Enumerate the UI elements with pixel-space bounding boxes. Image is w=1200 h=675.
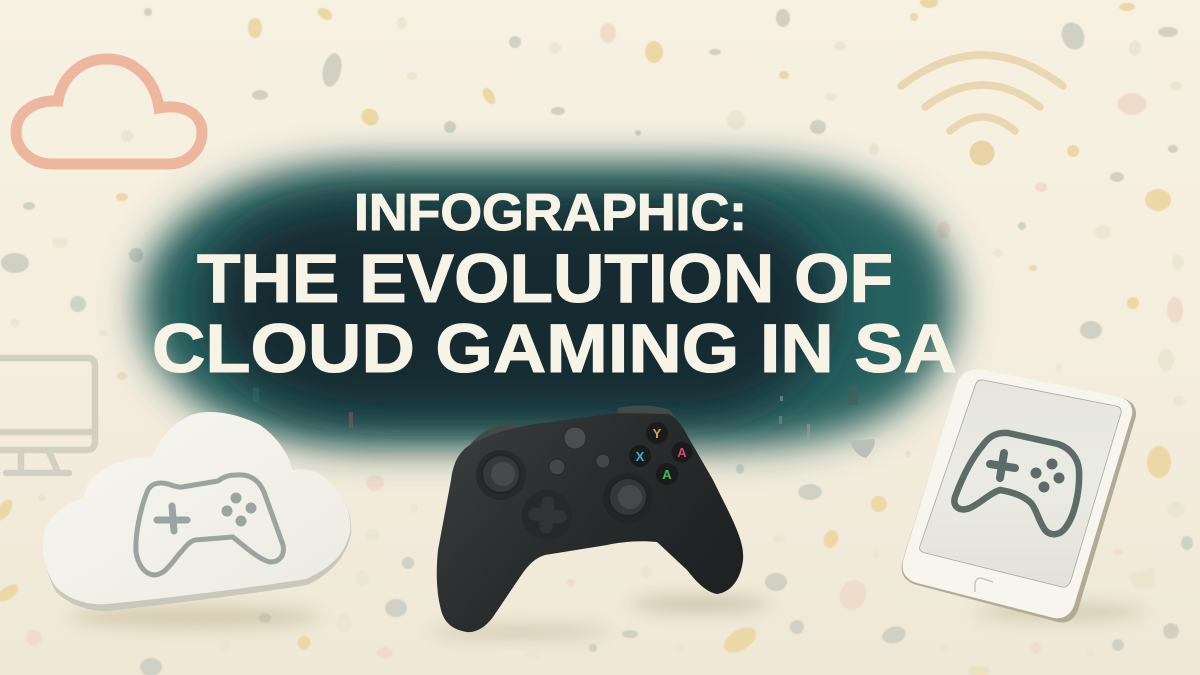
tablet screen: [920, 380, 1121, 587]
d-pad: [522, 490, 572, 540]
face buttons: A: [662, 467, 672, 482]
face buttons: Y: [653, 426, 662, 441]
title line: cloud gaming in sa: CLOUD GAMING IN SA: [152, 310, 957, 387]
title line: infographic: INFOGRAPHIC:: [354, 184, 747, 242]
teal title backdrop: [140, 163, 955, 447]
gray speck over backdrop edge: [850, 439, 875, 458]
icon: white tablet with gamepad: [902, 370, 1145, 622]
face buttons: [629, 422, 692, 485]
face buttons: A: [677, 445, 687, 460]
icon: monitor outline: [0, 358, 95, 473]
icon: black game controller: [430, 406, 770, 638]
title: [152, 184, 957, 387]
menu buttons: [549, 427, 610, 475]
controller bumpers: [470, 406, 680, 450]
backdrop glitch streaks: [253, 385, 858, 440]
left stick: [476, 450, 526, 500]
tablet body: [902, 371, 1136, 622]
icon: wifi: [901, 55, 1063, 166]
title line: the evolution of: THE EVOLUTION OF: [197, 240, 893, 317]
cloud gamepad icon: [136, 475, 283, 575]
tablet gamepad icon: [954, 433, 1079, 534]
tablet home button: [975, 578, 993, 592]
face buttons: X: [636, 449, 645, 464]
right stick: [603, 473, 653, 523]
icon: white cloud with gamepad: [43, 412, 351, 628]
controller body: [437, 413, 743, 632]
icon: outline cloud: [16, 59, 202, 164]
